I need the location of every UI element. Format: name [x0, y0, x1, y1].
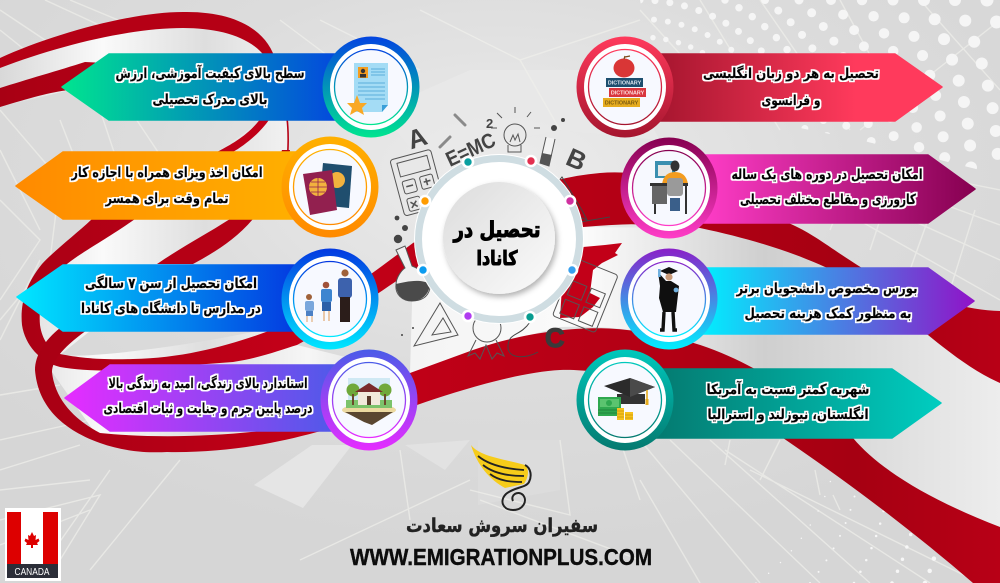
red ribbon: top left arc — [0, 12, 276, 70]
badge circle — [282, 136, 378, 238]
icon: certificate — [347, 63, 388, 115]
arrow banner — [16, 152, 300, 219]
text line 2: و فرانسوی — [762, 93, 820, 109]
icon: dictionaries and apple — [603, 56, 646, 107]
badge circle — [576, 350, 674, 450]
set square — [414, 303, 458, 346]
icon: passports — [303, 163, 352, 215]
badge circle — [282, 248, 378, 350]
formula exponent: 2 — [486, 116, 493, 131]
badge circle — [322, 36, 420, 138]
panel: one year courses — [620, 138, 975, 238]
logo name: سفیران سروش سعادت — [406, 515, 598, 537]
inner disc — [443, 182, 555, 294]
text line 2: تمام وقت برای همسر — [105, 191, 228, 207]
text line 2: بالای مدرک تحصیلی — [152, 92, 268, 108]
text line 1: بورس مخصوص دانشجویان برتر — [736, 281, 918, 297]
canada flag badge — [5, 508, 61, 581]
panel: study from age seven — [17, 248, 378, 350]
arrow banner — [700, 268, 974, 334]
text line 1: سطح بالای کیفیت آموزشی، ارزش — [116, 64, 304, 82]
arrow banner — [655, 369, 941, 438]
badge circle — [620, 248, 718, 350]
website: WWW.EMIGRATIONPLUS.COM — [350, 544, 652, 570]
medal — [468, 314, 504, 359]
icon: dictionaries and apple: DICTIONARY — [608, 80, 642, 86]
red ribbon: thin twist — [287, 118, 288, 168]
badge circle — [576, 36, 674, 138]
flask — [396, 246, 430, 301]
panel: two languages — [576, 36, 942, 138]
squiggle — [508, 322, 538, 357]
panel: scholarship — [620, 248, 974, 350]
centre subtitle: کانادا — [476, 246, 518, 270]
text line 2: کارورزی و مقاطع مختلف تحصیلی — [740, 192, 917, 208]
text line 2: در مدارس تا دانشگاه های کانادا — [81, 300, 261, 317]
text line 1: استاندارد بالای زندگی، امید به زندگی بالا — [108, 375, 308, 392]
arrow banner — [700, 155, 975, 223]
red ribbon: main lower band — [35, 328, 1000, 583]
text line 1: امکان تحصیل از سن ۷ سالگی — [85, 275, 257, 292]
test tube — [540, 118, 565, 166]
connector dots — [418, 156, 577, 322]
panel: visa with work permit — [16, 136, 378, 238]
light bulb — [491, 107, 540, 152]
maple leaf — [560, 240, 622, 318]
text line 1: شهریه کمتر نسبت به آمریکا — [706, 380, 870, 398]
formula: E=MC — [442, 129, 499, 172]
calculator right — [552, 258, 618, 333]
arrow banner — [655, 54, 942, 121]
icon: dictionaries and apple: DICTIONARY — [605, 100, 639, 106]
logo — [350, 445, 652, 570]
text line 1: امکان اخذ ویزای همراه با اجازه کار — [71, 165, 262, 181]
icon: house on island — [342, 378, 396, 425]
letter C: C — [545, 323, 564, 353]
badge circle — [620, 138, 718, 238]
calculator left — [390, 149, 445, 216]
icon: dictionaries and apple: DICTIONARY — [611, 90, 645, 96]
arrow banner — [65, 365, 345, 431]
icon: student at desk — [650, 160, 688, 214]
text line 1: امکان تحصیل در دوره های یک ساله — [732, 167, 922, 183]
icon: graduate — [658, 267, 679, 330]
text line 2: درصد پایین جرم و جنایت و ثبات اقتصادی — [104, 401, 312, 417]
panel: high quality education — [62, 36, 420, 138]
flag caption: CANADA — [14, 567, 50, 578]
doodles around the centre — [390, 107, 622, 359]
centre title: تحصیل در — [453, 218, 540, 243]
red ribbon: main upper band — [0, 62, 1000, 383]
paperclips — [440, 115, 465, 147]
icon: three people — [305, 269, 352, 322]
panel: standard of living — [65, 350, 418, 450]
outer disc — [414, 154, 584, 324]
centre badge — [414, 154, 584, 324]
text line 2: به منظور کمک هزینه تحصیل — [744, 306, 912, 322]
maple leaf — [24, 532, 40, 548]
icon: cap money coins — [598, 378, 655, 420]
arrow banner — [62, 54, 345, 120]
pencil — [558, 177, 610, 222]
letter B: B — [562, 142, 591, 177]
panel: lower tuition — [576, 350, 941, 450]
arrow banner — [17, 265, 300, 331]
logo wing — [471, 445, 531, 510]
small dots left — [394, 216, 414, 336]
letter A: A — [404, 121, 431, 155]
red ribbon: right strand — [157, 150, 290, 264]
text line 1: تحصیل به هر دو زبان انگلیسی — [703, 65, 879, 82]
text line 2: انگلستان، نیوزلند و استرالیا — [708, 406, 868, 423]
badge circle — [320, 350, 418, 450]
